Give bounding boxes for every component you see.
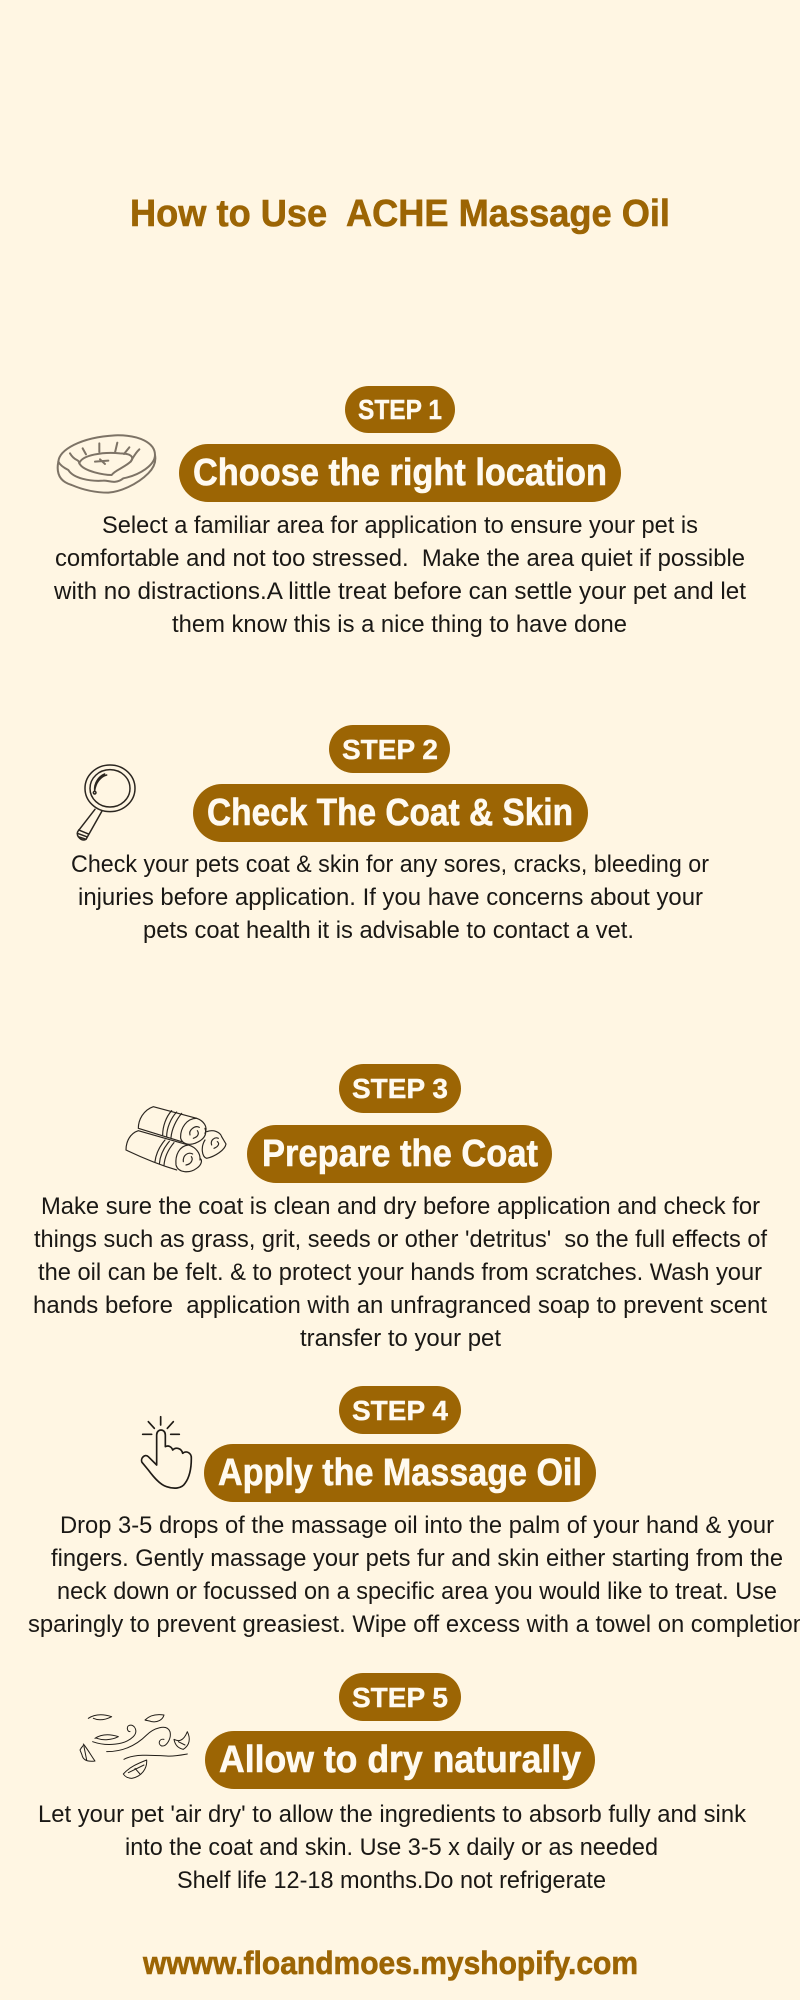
step 1 heading bbox=[179, 444, 621, 502]
icon: magnifying glass bbox=[77, 765, 135, 840]
panel: step 3 bbox=[33, 1064, 767, 1352]
step 3 body text: the oil can be felt. & to protect your hands from scratches. Wash your bbox=[38, 1259, 762, 1286]
panel: step 1 bbox=[53, 386, 746, 638]
step 3 body text: Make sure the coat is clean and dry before application and check for bbox=[41, 1193, 760, 1220]
icon: wind and leaves bbox=[80, 1715, 189, 1778]
step 3 heading bbox=[247, 1125, 552, 1183]
step 1 badge: STEP 1 bbox=[358, 394, 442, 425]
step 5 heading bbox=[205, 1731, 595, 1789]
step 4 badge bbox=[339, 1386, 461, 1434]
step 2 body text: injuries before application. If you have concerns about your bbox=[78, 884, 703, 911]
step 1 body text: Select a familiar area for application to ensure your pet is bbox=[102, 512, 698, 539]
step 3 body text: hands before application with an unfragranced soap to prevent scent bbox=[33, 1292, 767, 1319]
step 1 heading: Choose the right location bbox=[193, 452, 607, 494]
step 4 body text: Drop 3-5 drops of the massage oil into the palm of your hand & your bbox=[60, 1512, 774, 1539]
step 3 body text bbox=[33, 1193, 767, 1352]
step 5 body text bbox=[38, 1801, 747, 1894]
step 4 heading: Apply the Massage Oil bbox=[218, 1452, 582, 1494]
step 1 badge bbox=[345, 386, 455, 433]
step 2 body text bbox=[71, 851, 709, 944]
step 3 body text: things such as grass, grit, seeds or other 'detritus' so the full effects of bbox=[34, 1226, 767, 1253]
step 5 badge: STEP 5 bbox=[352, 1682, 448, 1713]
step 2 badge: STEP 2 bbox=[342, 734, 438, 765]
step 3 badge: STEP 3 bbox=[352, 1073, 448, 1104]
step 1 body text: them know this is a nice thing to have done bbox=[172, 611, 627, 638]
step 5 body text: Shelf life 12-18 months.Do not refrigerate bbox=[177, 1867, 606, 1894]
step 5 heading: Allow to dry naturally bbox=[219, 1739, 581, 1781]
step 2 body text: pets coat health it is advisable to contact a vet. bbox=[143, 917, 634, 944]
icon: tapping hand bbox=[142, 1417, 191, 1488]
panel: step 2 bbox=[71, 725, 709, 944]
panel: step 5 bbox=[38, 1673, 747, 1894]
step 2 heading: Check The Coat & Skin bbox=[207, 792, 573, 834]
step 4 body text: fingers. Gently massage your pets fur and skin either starting from the bbox=[51, 1545, 783, 1572]
step 4 badge: STEP 4 bbox=[352, 1395, 448, 1426]
icon: pet bed bbox=[58, 435, 155, 493]
step 4 body text: neck down or focussed on a specific area you would like to treat. Use bbox=[57, 1578, 777, 1605]
footer website link: wwww.floandmoes.myshopify.com bbox=[142, 1945, 638, 1981]
step 5 body text: Let your pet 'air dry' to allow the ingredients to absorb fully and sink bbox=[38, 1801, 747, 1828]
icon: rolled towels bbox=[126, 1107, 226, 1172]
step 2 heading bbox=[193, 784, 588, 842]
step 2 body text: Check your pets coat & skin for any sores, cracks, bleeding or bbox=[71, 851, 709, 878]
step 4 heading bbox=[204, 1444, 596, 1502]
step 5 body text: into the coat and skin. Use 3-5 x daily or as needed bbox=[125, 1834, 658, 1861]
step 1 body text: with no distractions.A little treat before can settle your pet and let bbox=[53, 578, 746, 605]
title: How to Use ACHE Massage Oil bbox=[130, 193, 670, 235]
step 3 body text: transfer to your pet bbox=[300, 1325, 501, 1352]
panel: step 4 bbox=[28, 1386, 800, 1638]
step 1 body text bbox=[53, 512, 746, 638]
step 1 body text: comfortable and not too stressed. Make the area quiet if possible bbox=[55, 545, 745, 572]
step 2 badge bbox=[329, 725, 450, 773]
step 3 heading: Prepare the Coat bbox=[262, 1133, 538, 1175]
step 4 body text bbox=[28, 1512, 800, 1638]
step 3 badge bbox=[339, 1064, 461, 1113]
step 5 badge bbox=[339, 1673, 461, 1721]
